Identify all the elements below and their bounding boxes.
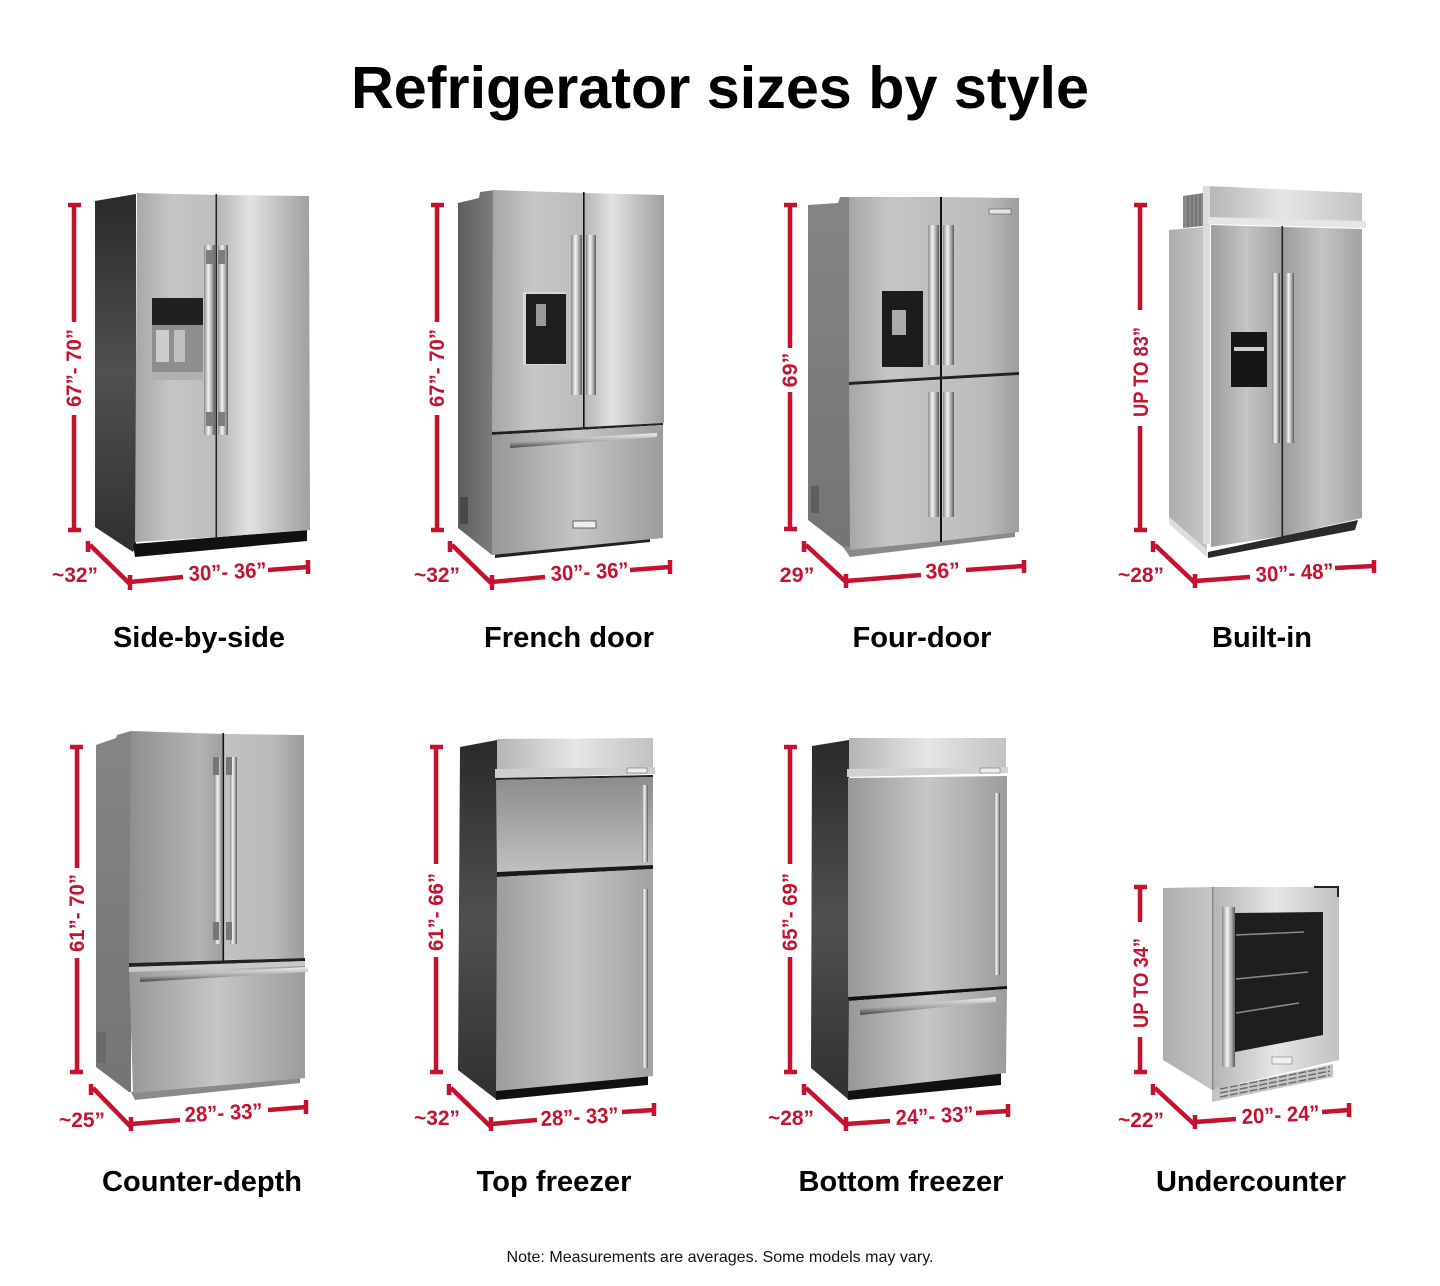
panel: french door bbox=[414, 190, 670, 654]
dimension: width: 30”- 48” bbox=[1255, 559, 1334, 587]
dimension: depth bbox=[780, 541, 846, 587]
dimension: depth bbox=[414, 541, 492, 587]
dimension: height bbox=[62, 205, 86, 530]
label: Counter-depth bbox=[102, 1166, 302, 1198]
dimension: width bbox=[846, 558, 1024, 588]
dimension: height: UP TO 34” bbox=[1129, 938, 1153, 1028]
dimension: depth: ~32” bbox=[414, 1106, 460, 1130]
refrigerator: side-by-side bbox=[95, 193, 310, 557]
panel: side-by-side bbox=[52, 193, 310, 654]
dimension: width: 28”- 33” bbox=[184, 1099, 263, 1127]
panel: four-door bbox=[778, 197, 1024, 654]
dimension: depth bbox=[59, 1084, 131, 1132]
dimension: height: 67”- 70” bbox=[62, 329, 86, 407]
dimension: width: 24”- 33” bbox=[895, 1102, 974, 1130]
refrigerator: french door bbox=[458, 190, 664, 558]
dimension: width bbox=[1195, 1101, 1349, 1129]
dimension: depth bbox=[1118, 541, 1195, 587]
label: French door bbox=[484, 622, 654, 654]
dimension: depth bbox=[1118, 1084, 1195, 1132]
dimension: width bbox=[130, 558, 308, 590]
dimension: height: 69” bbox=[778, 353, 802, 387]
label: Top freezer bbox=[476, 1166, 632, 1198]
panel: bottom freezer bbox=[768, 738, 1008, 1198]
refrigerator: top freezer bbox=[458, 738, 655, 1100]
dimension: depth bbox=[768, 1084, 846, 1130]
dimension: width bbox=[846, 1102, 1008, 1131]
dimension: depth: ~32” bbox=[52, 563, 98, 587]
dimension: height bbox=[425, 205, 449, 530]
footnote: Note: Measurements are averages. Some models may vary. bbox=[506, 1249, 934, 1266]
label: Undercounter bbox=[1156, 1166, 1346, 1198]
dimension: depth: ~28” bbox=[768, 1106, 814, 1130]
dimension: height: UP TO 83” bbox=[1129, 327, 1153, 417]
dimension: depth: ~22” bbox=[1118, 1108, 1164, 1132]
dimension: width bbox=[491, 1103, 654, 1131]
refrigerator: bottom freezer bbox=[811, 738, 1008, 1100]
label: Four-door bbox=[852, 622, 992, 654]
panel: top freezer bbox=[414, 738, 655, 1198]
panel: built-in bbox=[1118, 186, 1374, 654]
dimension: height: 65”- 69” bbox=[778, 873, 802, 951]
dimension: width bbox=[131, 1099, 306, 1131]
dimension: height bbox=[778, 747, 802, 1072]
label: Bottom freezer bbox=[798, 1166, 1004, 1198]
panel: undercounter bbox=[1118, 886, 1349, 1198]
label: Built-in bbox=[1212, 622, 1312, 654]
dimension: height bbox=[1129, 205, 1153, 530]
dimension: width: 36” bbox=[925, 558, 961, 584]
label: Side-by-side bbox=[113, 622, 285, 654]
dimension: height: 67”- 70” bbox=[425, 329, 449, 407]
dimension: height: 61”- 66” bbox=[424, 873, 448, 951]
panel: counter-depth bbox=[59, 731, 308, 1198]
title: Refrigerator sizes by style bbox=[351, 55, 1089, 121]
refrigerator: built-in bbox=[1169, 186, 1366, 558]
dimension: height bbox=[424, 747, 448, 1072]
dimension: width: 30”- 36” bbox=[188, 558, 267, 586]
dimension: width bbox=[492, 558, 670, 590]
refrigerator: counter-depth bbox=[96, 731, 308, 1100]
dimension: width: 30”- 36” bbox=[550, 558, 629, 586]
dimension: width bbox=[1195, 559, 1374, 588]
dimension: depth: ~25” bbox=[59, 1108, 105, 1132]
dimension: height bbox=[1129, 887, 1153, 1072]
refrigerator: four-door bbox=[808, 197, 1019, 557]
refrigerator: undercounter bbox=[1163, 886, 1339, 1102]
dimension: depth: ~28” bbox=[1118, 563, 1164, 587]
dimension: depth bbox=[52, 541, 130, 587]
dimension: width: 28”- 33” bbox=[540, 1103, 619, 1131]
dimension: depth: ~32” bbox=[414, 563, 460, 587]
dimension: height bbox=[65, 747, 89, 1072]
dimension: height: 61”- 70” bbox=[65, 874, 89, 952]
dimension: width: 20”- 24” bbox=[1241, 1101, 1320, 1129]
dimension: depth: 29” bbox=[780, 563, 814, 587]
dimension: height bbox=[778, 205, 802, 529]
dimension: depth bbox=[414, 1084, 491, 1130]
